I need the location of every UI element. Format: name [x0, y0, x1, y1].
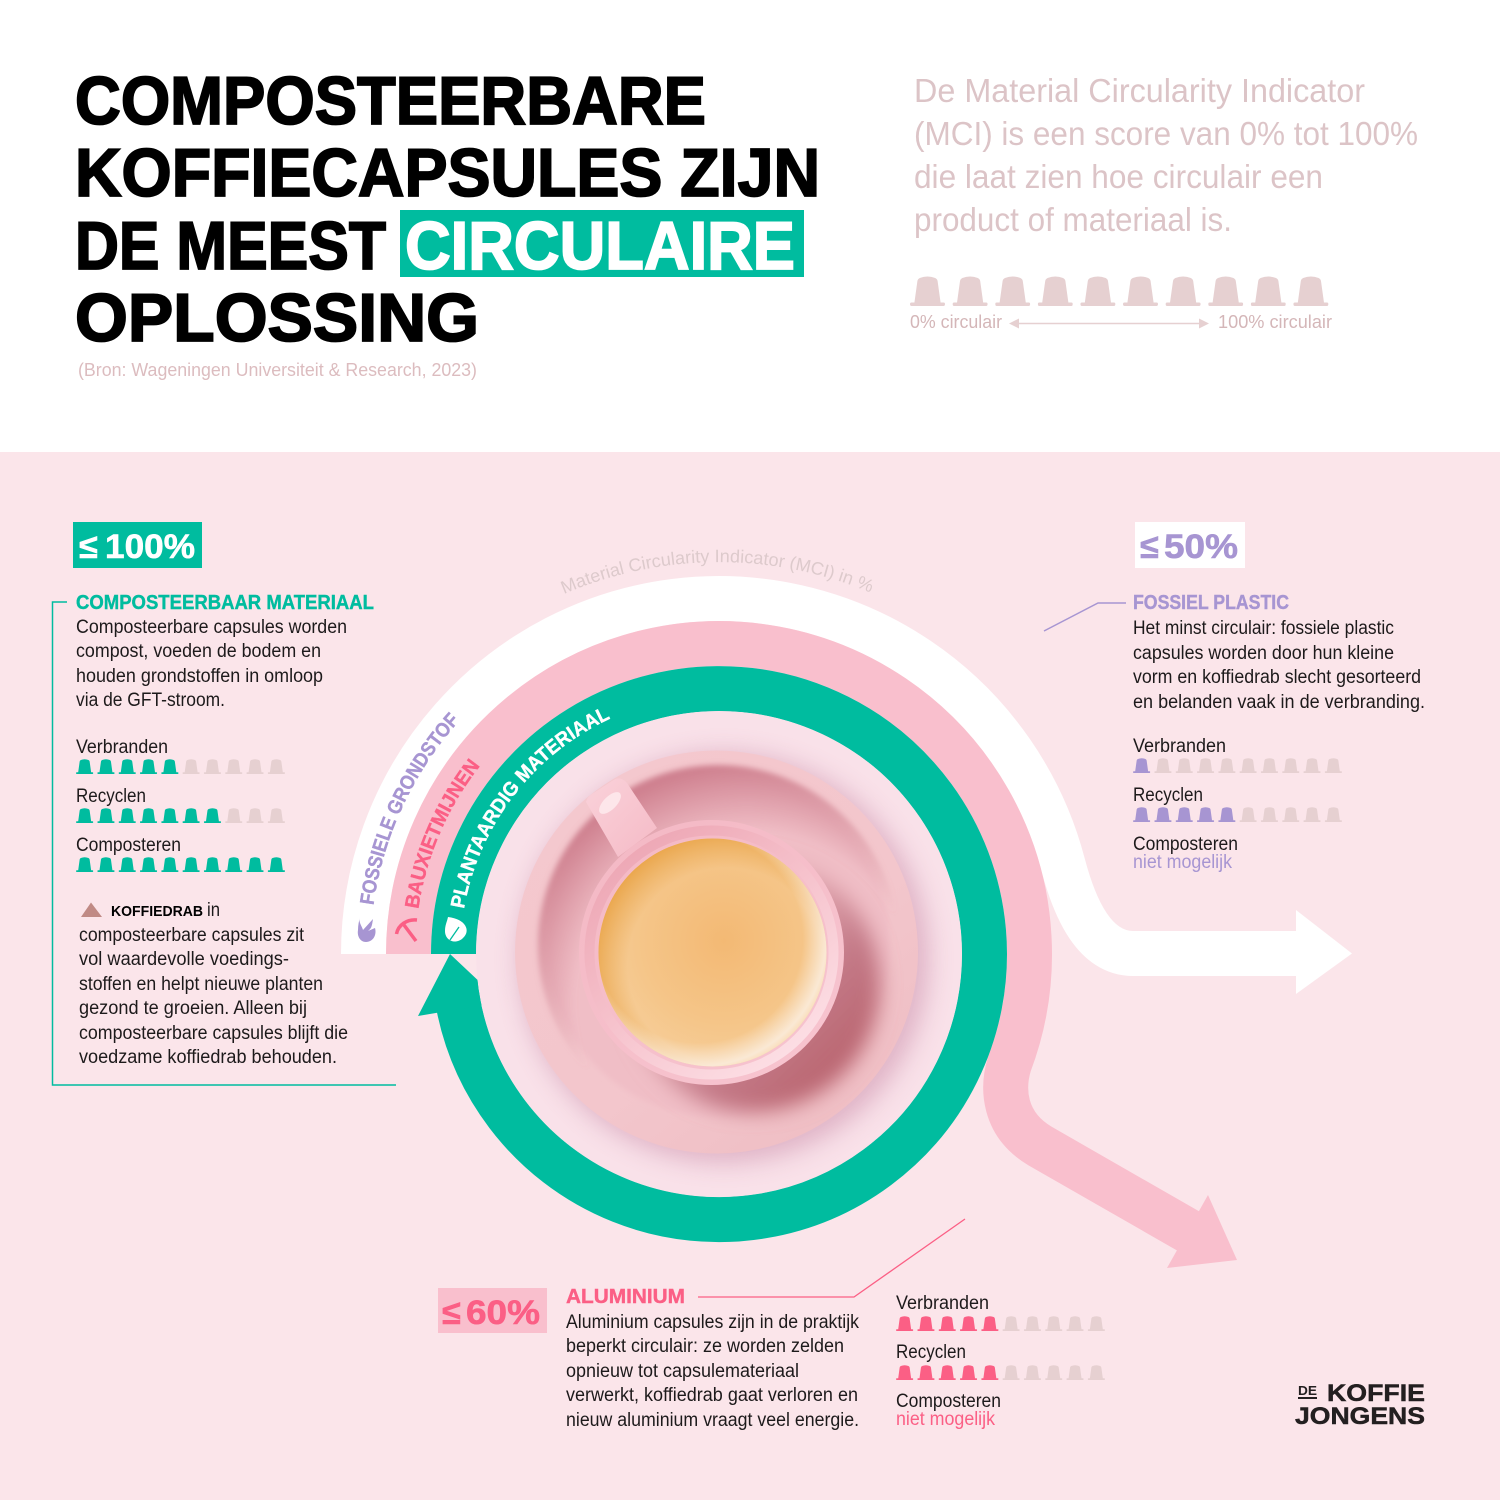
- body text: Composteerbare capsules worden: [76, 617, 347, 638]
- badge: ≤: [442, 1294, 461, 1332]
- scale legend with arrow: 100% circulair: [1218, 312, 1332, 332]
- koffiedrab note: stoffen en helpt nieuwe planten: [79, 974, 323, 995]
- logo: KOFFIE: [1327, 1380, 1425, 1407]
- bracket line: [52, 602, 396, 1085]
- saucer well: [536, 762, 886, 1084]
- verbranden rating: [76, 737, 285, 774]
- recyclen rating: [1133, 785, 1342, 822]
- logo: DE: [1298, 1383, 1317, 1398]
- body text: en belanden vaak in de verbranding.: [1133, 692, 1425, 713]
- body text: houden grondstoffen in omloop: [76, 666, 323, 687]
- coffee: [598, 838, 826, 1066]
- body text: [76, 617, 347, 711]
- leader line: [698, 1219, 965, 1297]
- body text: vorm en koffiedrab slecht gesorteerd: [1133, 667, 1421, 688]
- verbranden rating: Verbranden: [76, 737, 168, 758]
- band labels: FOSSIELE GRONDSTOF: [360, 712, 456, 904]
- icon: leaf: [445, 917, 467, 942]
- pink flow arrow: bauxite: [408, 644, 1237, 1268]
- capsule scale: [910, 276, 1328, 306]
- icon: pickaxe: [396, 920, 417, 941]
- icon: coffee grounds: [81, 902, 102, 917]
- pink lower panel: [0, 452, 1500, 1500]
- badge: [438, 1288, 547, 1333]
- recyclen rating: [76, 786, 285, 823]
- composteren status: Composteren: [896, 1391, 1001, 1412]
- badge: [73, 522, 202, 568]
- body text: Het minst circulair: fossiele plastic: [1133, 618, 1394, 639]
- source: (Bron: Wageningen Universiteit & Research, 2023): [78, 360, 477, 380]
- verbranden rating: Verbranden: [1133, 736, 1226, 757]
- title: OPLOSSING: [75, 280, 479, 356]
- MCI explanation: die laat zien hoe circulair een: [914, 158, 1323, 195]
- koffiedrab note: in: [207, 900, 220, 921]
- handle: [586, 778, 657, 857]
- verbranden rating: [896, 1293, 1105, 1331]
- page background: [0, 0, 1500, 452]
- body text: [566, 1312, 859, 1431]
- MCI explanation: De Material Circularity Indicator: [914, 72, 1365, 109]
- koffiedrab note: composteerbare capsules zit: [79, 925, 305, 946]
- composteren status: [896, 1391, 1001, 1430]
- curved axis label: Material Circularity Indicator (MCI) in %: [560, 550, 872, 594]
- recyclen rating: Recyclen: [896, 1342, 966, 1363]
- heading: FOSSIEL PLASTIC: [1133, 592, 1289, 614]
- band labels: PLANTAARDIG MATERIAAL: [450, 709, 610, 908]
- band labels: [360, 709, 610, 908]
- badge: 50%: [1164, 528, 1238, 566]
- body text: Aluminium capsules zijn in de praktijk: [566, 1312, 859, 1333]
- composteren rating: Composteren: [76, 835, 181, 856]
- icon: flame: [358, 917, 376, 942]
- cup rim: [579, 820, 844, 1085]
- heading: COMPOSTEERBAAR MATERIAAL: [76, 592, 374, 614]
- koffiedrab note: voedzame koffiedrab behouden.: [79, 1047, 337, 1068]
- koffiedrab note: vol waardevolle voedings-: [79, 949, 289, 970]
- saucer: [515, 750, 918, 1154]
- body text: nieuw aluminium vraagt veel energie.: [566, 1410, 859, 1431]
- badge: ≤: [1140, 528, 1159, 566]
- body text: beperkt circulair: ze worden zelden: [566, 1336, 844, 1357]
- koffiedrab note: composteerbare capsules blijft die: [79, 1023, 348, 1044]
- body text: opnieuw tot capsulemateriaal: [566, 1361, 799, 1382]
- recyclen rating: Recyclen: [76, 786, 146, 807]
- logo: [1295, 1380, 1425, 1430]
- title: DE MEEST: [75, 208, 386, 284]
- badge: 100%: [105, 528, 195, 566]
- body text: capsules worden door hun kleine: [1133, 643, 1394, 664]
- panel: aluminium: [438, 1219, 1105, 1431]
- badge: [1135, 522, 1245, 568]
- badge: ≤: [79, 528, 98, 566]
- body text: verwerkt, koffiedrab gaat verloren en: [566, 1385, 858, 1406]
- green circular arrow: plant material: [418, 689, 984, 1220]
- body text: compost, voeden de bodem en: [76, 641, 321, 662]
- body text: via de GFT-stroom.: [76, 690, 225, 711]
- recyclen rating: [896, 1342, 1105, 1380]
- cup cast shadow: [624, 856, 880, 1112]
- band labels: BAUXIETMIJNEN: [404, 758, 480, 908]
- scale legend with arrow: [910, 312, 1332, 332]
- composteren status: niet mogelijk: [896, 1409, 995, 1430]
- title: KOFFIECAPSULES ZIJN: [75, 135, 820, 211]
- composteren status: niet mogelijk: [1133, 852, 1232, 873]
- coffee cup on saucer: [476, 711, 962, 1197]
- recyclen rating: Recyclen: [1133, 785, 1203, 806]
- scale legend with arrow: 0% circulair: [910, 312, 1002, 332]
- MCI explanation: (MCI) is een score van 0% tot 100%: [914, 115, 1418, 152]
- composteren rating: [76, 835, 285, 872]
- MCI explanation: product of materiaal is.: [914, 201, 1232, 238]
- panel: fossiel plastic: [1044, 522, 1425, 873]
- saucer shadow: [476, 711, 962, 1197]
- MCI explanation: [914, 72, 1418, 238]
- verbranden rating: [1133, 736, 1342, 773]
- koffiedrab note: KOFFIEDRAB: [111, 903, 203, 920]
- title: [75, 63, 820, 356]
- white flow arrow: fossil: [364, 599, 1352, 994]
- body text: [1133, 618, 1425, 713]
- logo: JONGENS: [1295, 1403, 1425, 1430]
- panel: composteerbaar materiaal: [52, 522, 396, 1085]
- verbranden rating: Verbranden: [896, 1293, 989, 1314]
- title: COMPOSTEERBARE: [75, 63, 706, 139]
- composteren status: [1133, 834, 1238, 873]
- heading: ALUMINIUM: [566, 1286, 685, 1308]
- badge: 60%: [466, 1294, 540, 1332]
- composteren status: Composteren: [1133, 834, 1238, 855]
- koffiedrab note: [79, 900, 348, 1068]
- koffiedrab note: gezond te groeien. Alleen bij: [79, 998, 307, 1019]
- leader line: [1044, 603, 1126, 631]
- title: CIRCULAIRE: [405, 208, 795, 284]
